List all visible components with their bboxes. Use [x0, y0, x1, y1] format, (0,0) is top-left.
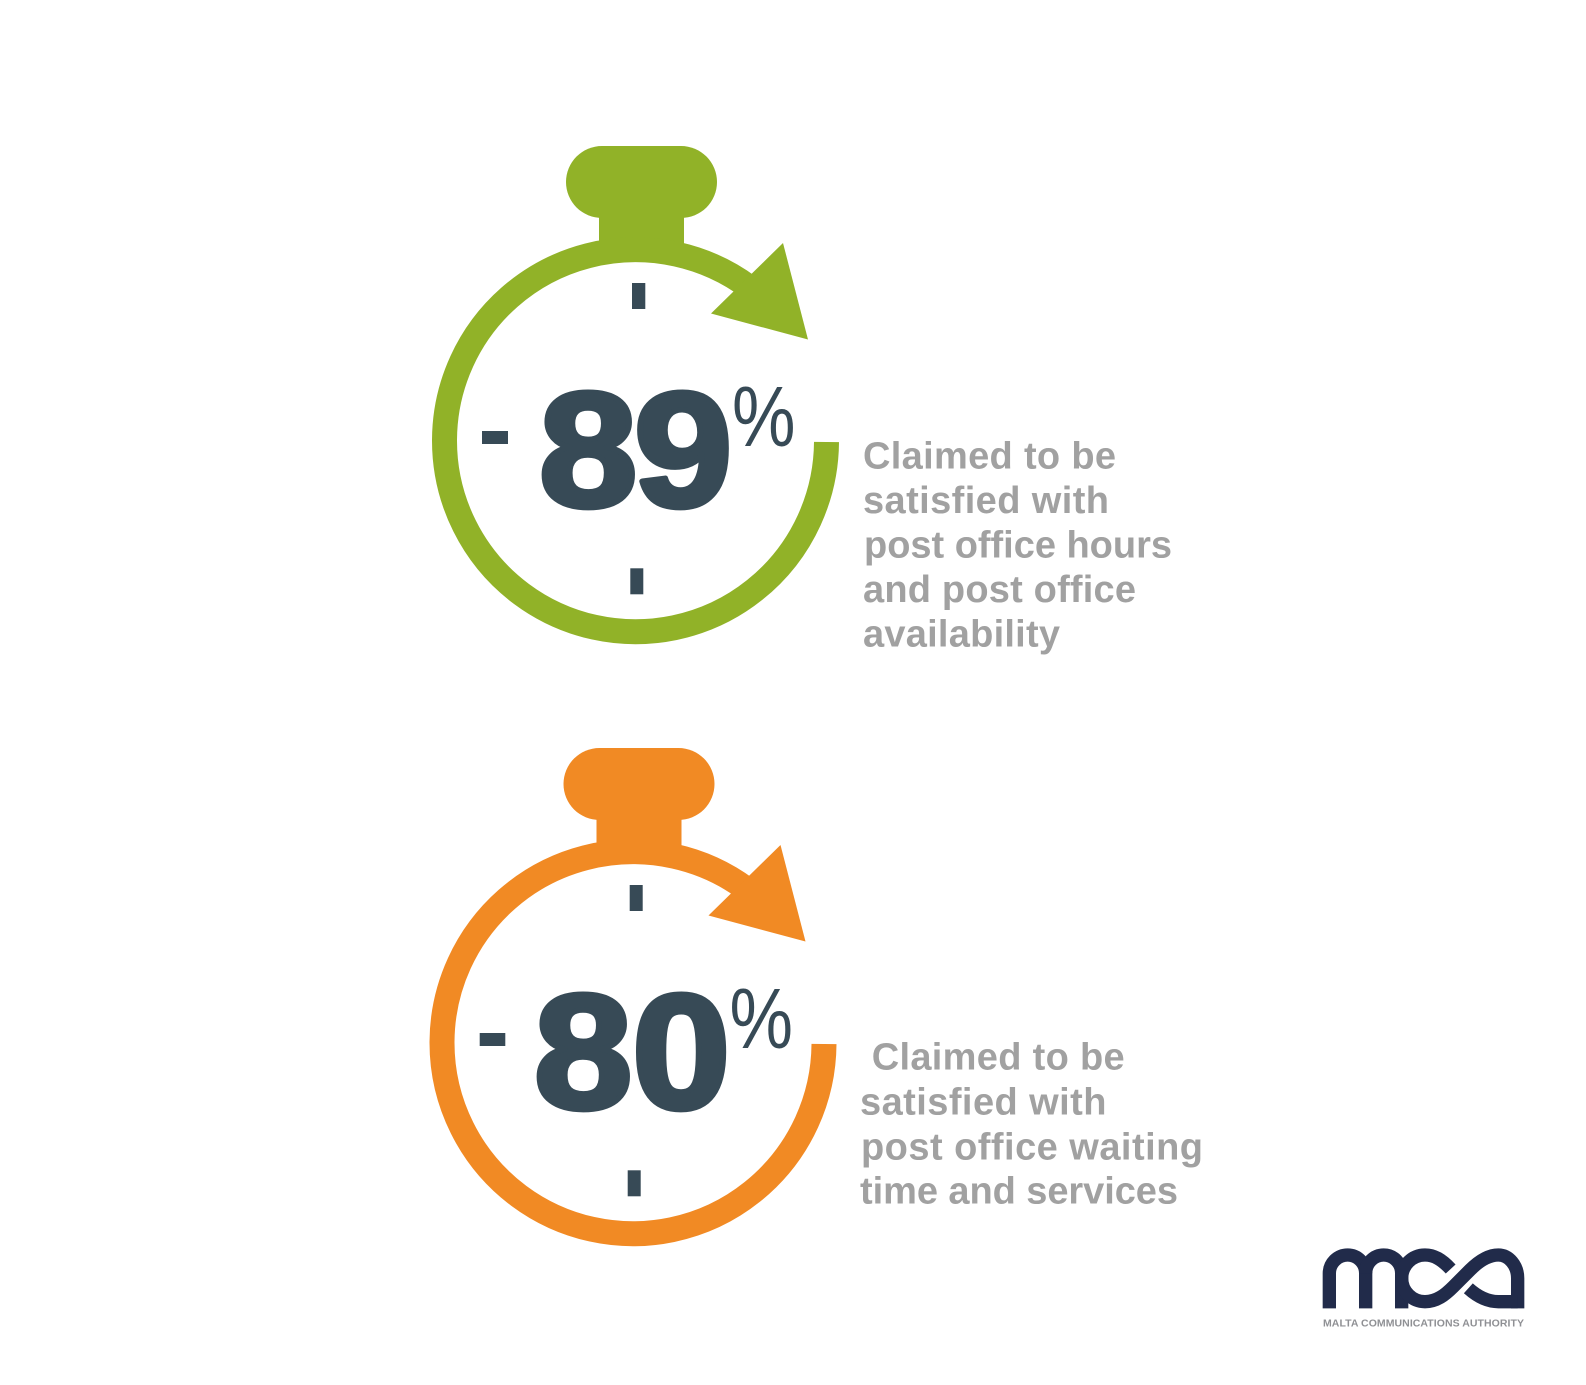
text block: hours and availability: satisfied with [863, 480, 1109, 522]
text block: hours and availability: availability [863, 613, 1060, 655]
text block: hours and availability: post office hours [864, 525, 1172, 567]
percent sign: % [732, 369, 795, 464]
text block: hours and availability: and post office [863, 569, 1136, 611]
icon: clock ticks [480, 885, 643, 1196]
percent sign: % [730, 971, 793, 1066]
logo mark [1329, 1255, 1518, 1308]
text block: hours and availability [863, 435, 1172, 655]
number: 80: 80 [534, 962, 730, 1143]
logo: Malta Communications Authority [1323, 1255, 1524, 1330]
text block: waiting time and services: post office waiting [861, 1126, 1203, 1168]
text block: waiting time and services: satisfied with [860, 1081, 1106, 1123]
text block: waiting time and services [860, 1036, 1203, 1212]
panel: green stopwatch 89% [445, 146, 826, 632]
icon: orange circular arrow [442, 845, 824, 1234]
text block: waiting time and services: time and services [860, 1170, 1178, 1212]
panel: orange stopwatch 80% [442, 748, 824, 1234]
logo wordmark: MALTA COMMUNICATIONS AUTHORITY [1323, 1318, 1524, 1330]
text block: waiting time and services: Claimed to be [872, 1036, 1125, 1078]
icon: green stopwatch handle [566, 146, 717, 252]
icon: green circular arrow [445, 243, 826, 632]
icon: orange stopwatch handle [564, 748, 714, 854]
icon: clock ticks [482, 283, 645, 594]
text block: hours and availability: Claimed to be [863, 435, 1116, 477]
number: 89: 89 [539, 360, 732, 541]
